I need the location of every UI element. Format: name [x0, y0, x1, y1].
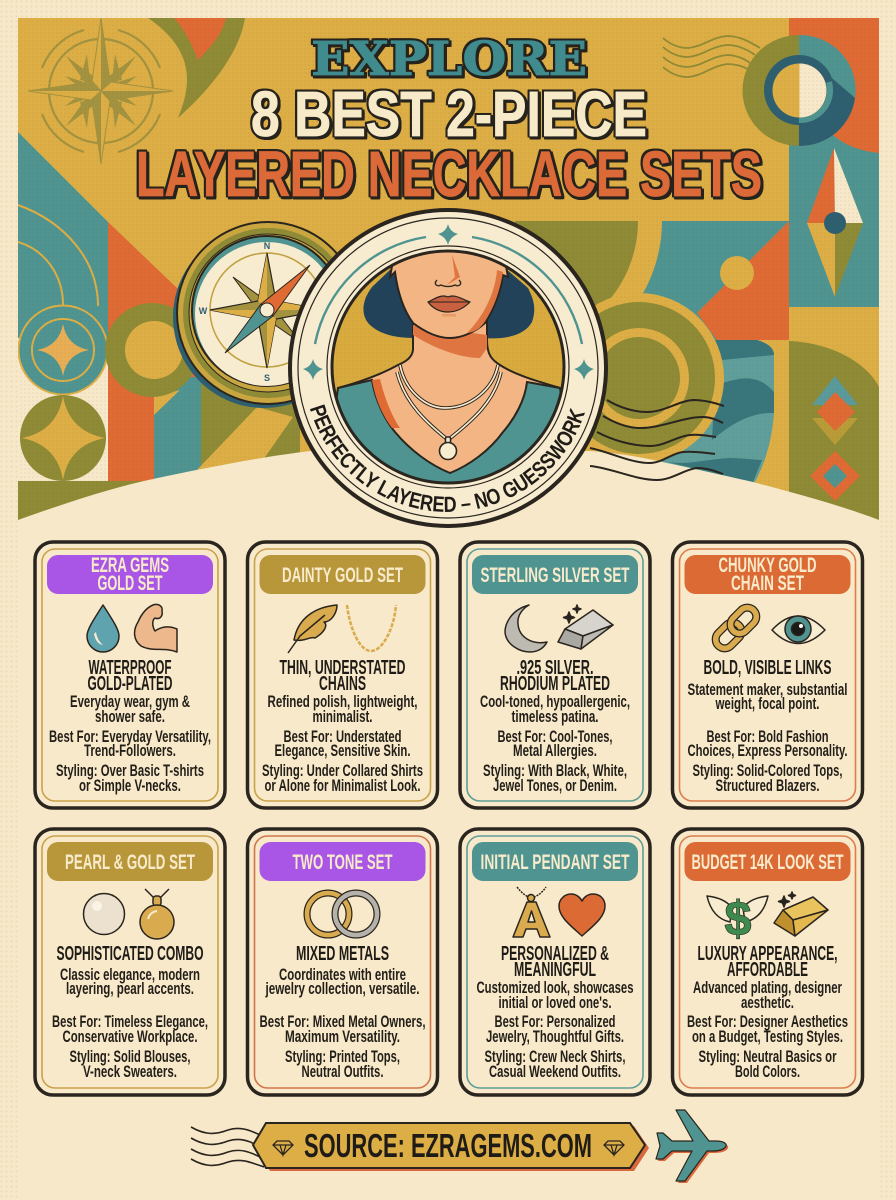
banner ribbon [257, 1126, 649, 1171]
icon: teal circle with gold star [18, 306, 108, 394]
card heading: TWO TONE SET [292, 851, 393, 874]
portrait illustration [334, 252, 562, 482]
card text: Jewelry, Thoughtful Gifts. [486, 1028, 624, 1046]
icon: letter A pendant [513, 887, 550, 937]
concentric circles [592, 293, 724, 461]
postal waves top right [663, 36, 760, 77]
card text: or Alone for Minimalist Look. [264, 777, 420, 795]
card text: Styling: Solid Blouses, [70, 1048, 190, 1066]
icon: gold bar [774, 892, 828, 936]
icon: winged dollar [707, 893, 768, 946]
card text [49, 657, 211, 795]
card text: Best For: Bold Fashion [706, 728, 828, 746]
card 4: Chunky Gold Chain Set [672, 542, 862, 808]
card 1: Ezra Gems Gold Set [35, 542, 225, 808]
card 5: Pearl & Gold Set [35, 829, 225, 1095]
icon: flexed arm [135, 604, 177, 652]
icon: vintage compass: N [264, 241, 270, 251]
card text: Best For: Personalized [494, 1013, 616, 1031]
card heading: STERLING SILVER SET [480, 564, 630, 587]
card heading [718, 554, 816, 595]
card text: Best For: Understated [284, 728, 402, 746]
icon: eye [772, 616, 825, 644]
lips [428, 296, 470, 312]
pendant [440, 437, 456, 460]
card heading: DAINTY GOLD SET [282, 564, 403, 587]
medallion portrait [288, 208, 608, 528]
icon: gold chain [347, 605, 396, 651]
title line: 8 best 2-piece: 8 BEST 2-PIECE [251, 78, 647, 150]
card text: initial or loved one's. [498, 994, 612, 1012]
icon: gold bead pendant [140, 889, 174, 939]
icon: left teal shape with arcs [18, 132, 108, 481]
card text: or Simple V-necks. [79, 777, 181, 795]
dress orange trim [372, 379, 400, 428]
card 2: Dainty Gold Set [248, 542, 438, 808]
card text: shower safe. [95, 708, 165, 726]
icon: vintage compass: S [264, 373, 270, 383]
card text: RHODIUM PLATED [500, 673, 610, 695]
card heading: EZRA GEMS [91, 554, 169, 577]
card text: Styling: Neutral Basics or [698, 1048, 837, 1066]
card text: Best For: Timeless Elegance, [52, 1013, 208, 1031]
card text: Structured Blazers. [716, 777, 820, 795]
card text: AFFORDABLE [727, 959, 808, 981]
title line: explore: EXPLORE [311, 32, 587, 87]
card text: Coordinates with entire [279, 966, 406, 984]
card 8: Budget 14K Look Set [672, 829, 862, 1095]
right geometric shapes [515, 221, 789, 490]
card text: Customized look, showcases [476, 979, 634, 997]
card text: Everyday wear, gym & [70, 693, 190, 711]
card text: Styling: Crew Neck Shirts, [484, 1048, 626, 1066]
icon: chain links [712, 604, 760, 652]
top right column with ring [742, 18, 879, 307]
olive and orange V shape [148, 18, 245, 118]
icon: airplane [656, 1110, 728, 1183]
right bottom block with diamonds [789, 341, 879, 501]
card text: Casual Weekend Outfits. [489, 1063, 621, 1081]
card heading: PEARL & GOLD SET [65, 851, 195, 874]
card text: Jewel Tones, or Denim. [493, 777, 617, 795]
face shadow [447, 255, 503, 333]
halftone texture [18, 18, 879, 520]
nose [435, 280, 461, 286]
source banner [191, 1110, 728, 1183]
card text: Styling: Over Basic T-shirts [56, 762, 204, 780]
card 3: Sterling Silver Set [460, 542, 650, 808]
icon: compass needle [807, 148, 863, 297]
card text: PERSONALIZED & [501, 943, 609, 965]
icon: pearl [84, 894, 124, 934]
card text: minimalist. [312, 708, 372, 726]
dress [336, 378, 561, 482]
icon: winged dollar: $ [725, 893, 752, 946]
icon: olive circle with gold star [20, 395, 106, 481]
card heading: CHAIN SET [731, 572, 804, 595]
card text: jewelry collection, versatile. [265, 980, 420, 998]
card text [476, 943, 634, 1081]
icon: diamond right [604, 1141, 624, 1155]
card text: SOPHISTICATED COMBO [56, 943, 204, 965]
card text: layering, pearl accents. [66, 980, 194, 998]
card text: timeless patina. [512, 708, 598, 726]
title [136, 32, 762, 210]
card text: Refined polish, lightweight, [268, 693, 418, 711]
card text [52, 943, 208, 1081]
postmark wave lines [590, 400, 724, 480]
banner waves [191, 1127, 264, 1167]
card heading [91, 554, 169, 595]
icon: compass rose watermark [28, 18, 173, 164]
card text: aesthetic. [741, 994, 794, 1012]
card text: MEANINGFUL [514, 959, 596, 981]
card text [688, 657, 848, 795]
card text [262, 657, 423, 795]
card text: .925 SILVER. [516, 657, 594, 679]
card text: THIN, UNDERSTATED [280, 657, 406, 679]
card text: WATERPROOF [88, 657, 172, 679]
card text: Conservative Workplace. [62, 1028, 198, 1046]
card 7: Initial Pendant Set [460, 829, 650, 1095]
icon: vintage compass [173, 221, 338, 408]
necklaces [397, 365, 501, 440]
card text: Best For: Cool-Tones, [498, 728, 612, 746]
hair [363, 268, 534, 338]
card text: Neutral Outfits. [302, 1063, 384, 1081]
card text: weight, focal point. [715, 695, 820, 713]
card heading: CHUNKY GOLD [718, 554, 816, 577]
card text: MIXED METALS [296, 943, 389, 965]
banner text: SOURCE: EZRAGEMS.COM [304, 1127, 592, 1164]
face [390, 250, 508, 338]
card text [260, 943, 426, 1081]
card 6: Two Tone Set [248, 829, 438, 1095]
icon: feather [288, 605, 337, 653]
card text: CHAINS [319, 673, 366, 695]
neck shadow [413, 325, 487, 358]
circular slogan: PERFECTLY LAYERED – NO GUESSWORK [310, 404, 585, 512]
icon: vintage compass: W [199, 306, 208, 316]
card text: Styling: Under Collared Shirts [262, 762, 423, 780]
card text: Maximum Versatility. [285, 1028, 400, 1046]
card text: Styling: Printed Tops, [285, 1048, 400, 1066]
card text: V-neck Sweaters. [83, 1063, 177, 1081]
icon: diamond left [273, 1141, 293, 1155]
card text: Best For: Mixed Metal Owners, [260, 1013, 426, 1031]
card text: Elegance, Sensitive Skin. [274, 742, 410, 760]
card text: Best For: Everyday Versatility, [49, 728, 211, 746]
card text: Styling: With Black, White, [483, 762, 627, 780]
teal ring arcs [315, 237, 582, 344]
card text: Bold Colors. [735, 1063, 800, 1081]
card text [480, 657, 630, 795]
card heading: GOLD SET [98, 572, 163, 595]
ring stars [303, 224, 594, 380]
card text: GOLD-PLATED [88, 673, 172, 695]
icon: silver bar [558, 605, 613, 649]
header illustration panel [18, 18, 879, 526]
icon: crescent moon [505, 605, 547, 652]
icon: water drop [87, 605, 119, 652]
card text [687, 943, 848, 1081]
cream curve [18, 451, 879, 526]
icon: interlocked rings [307, 893, 377, 935]
card heading: INITIAL PENDANT SET [480, 851, 630, 874]
icon: heart [559, 894, 605, 936]
card text: Cool-toned, hypoallergenic, [480, 693, 630, 711]
card text: Metal Allergies. [513, 742, 597, 760]
skin: neck and shoulders [336, 320, 561, 472]
geometric columns [18, 222, 300, 520]
card text: Trend-Followers. [84, 742, 176, 760]
card text: Classic elegance, modern [60, 966, 200, 984]
